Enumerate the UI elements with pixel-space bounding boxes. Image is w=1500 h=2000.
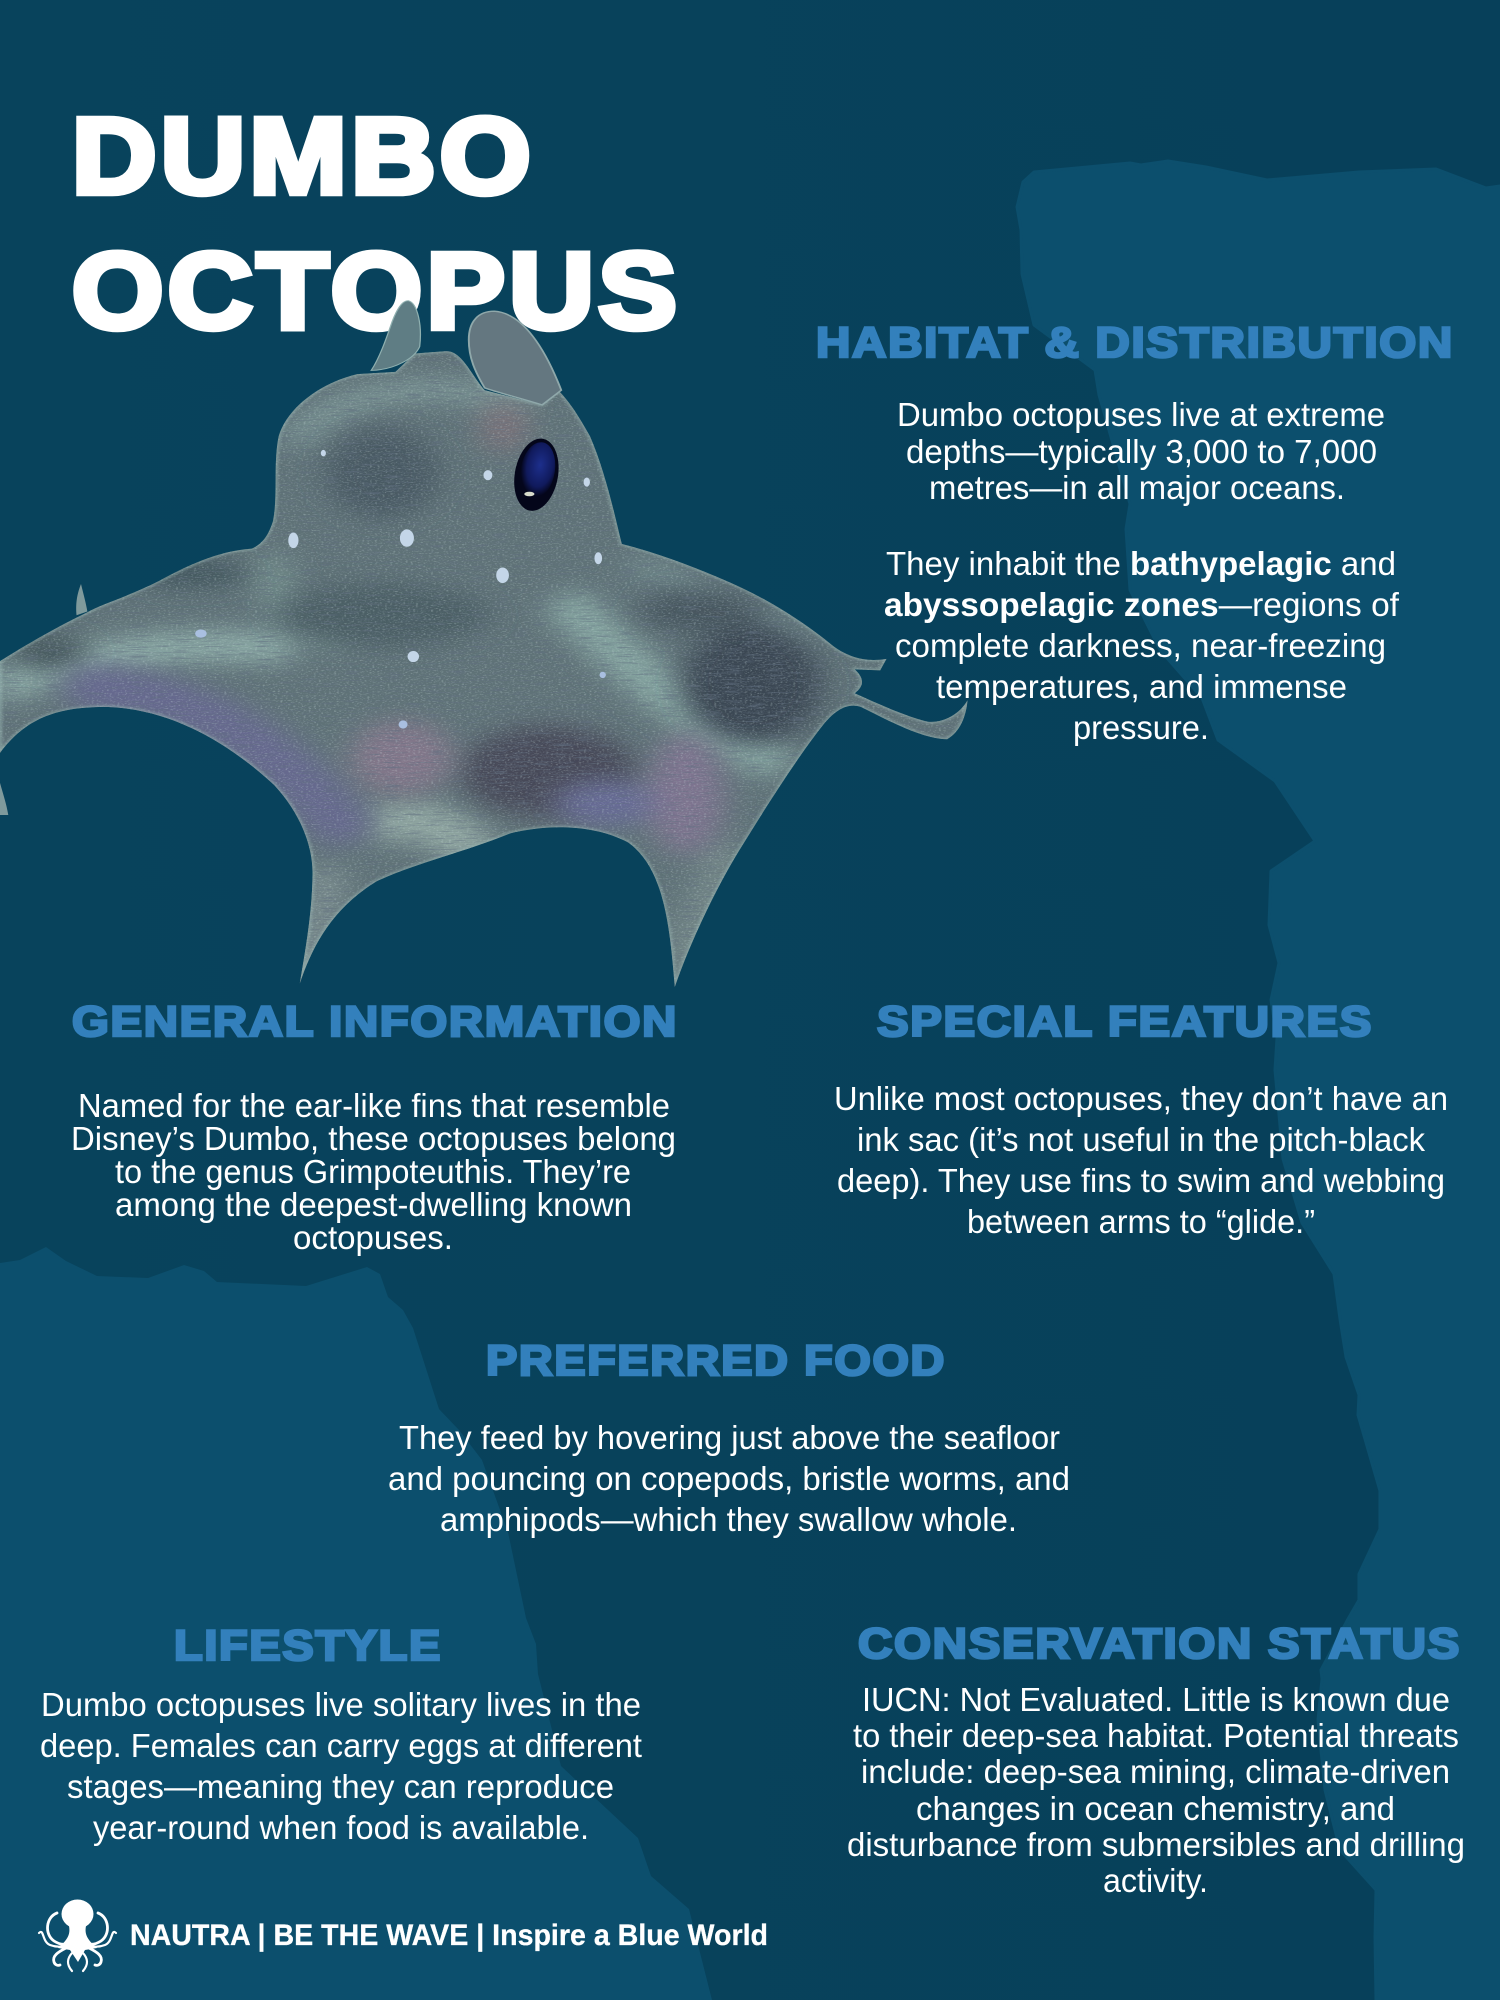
text: habitat body bbox=[884, 396, 1400, 746]
section: habitat and distribution bbox=[816, 319, 1454, 746]
text: conservation status body: to their deep-sea habitat. Potential threats bbox=[853, 1717, 1459, 1754]
arm tip left bbox=[0, 783, 8, 815]
text: preferred food body: amphipods—which they swallow whole. bbox=[440, 1501, 1017, 1538]
text: special features body: deep). They use fins to swim and webbing bbox=[837, 1162, 1445, 1199]
pale rim bbox=[0, 351, 968, 987]
heading: lifestyle: LIFESTYLE bbox=[174, 1622, 442, 1670]
text: habitat body: Dumbo octopuses live at extreme bbox=[897, 396, 1385, 433]
heading: special features: SPECIAL FEATURES bbox=[877, 998, 1373, 1046]
text: general information body: Disney’s Dumbo, these octopuses belong bbox=[71, 1120, 676, 1157]
text: special features body: Unlike most octopuses, they don’t have an bbox=[834, 1080, 1448, 1117]
section: preferred food bbox=[388, 1337, 1070, 1538]
section: lifestyle bbox=[40, 1622, 642, 1846]
text: conservation status body: IUCN: Not Evaluated. Little is known due bbox=[862, 1681, 1450, 1718]
light bands bbox=[13, 390, 804, 978]
text: habitat body: pressure. bbox=[1073, 709, 1209, 746]
text: conservation status body: disturbance from submersibles and drilling bbox=[847, 1826, 1465, 1863]
body bbox=[0, 351, 968, 987]
heading: conservation status: CONSERVATION STATUS bbox=[858, 1620, 1461, 1668]
text: lifestyle body: year-round when food is available. bbox=[93, 1809, 589, 1846]
heading: habitat: HABITAT & DISTRIBUTION bbox=[816, 319, 1454, 367]
text: preferred food body: and pouncing on copepods, bristle worms, and bbox=[388, 1460, 1070, 1497]
title bbox=[72, 95, 681, 351]
background: lighter lower-left rock shape bbox=[0, 1247, 712, 2000]
dark patches bbox=[13, 427, 823, 817]
mauve web patches bbox=[96, 402, 724, 854]
background: lighter right rock shape bbox=[1017, 161, 1500, 2000]
text: conservation status body: include: deep-sea mining, climate-driven bbox=[861, 1753, 1450, 1790]
eye bbox=[510, 437, 563, 512]
text: lifestyle body bbox=[40, 1686, 642, 1846]
text: general information body: among the deepest-dwelling known bbox=[115, 1186, 632, 1223]
text: habitat body: complete darkness, near-freezing bbox=[895, 627, 1386, 664]
text: conservation status body: changes in ocean chemistry, and bbox=[916, 1790, 1395, 1827]
text: lifestyle body: deep. Females can carry eggs at different bbox=[40, 1727, 642, 1764]
left ear fin bbox=[371, 301, 420, 370]
text: lifestyle body: Dumbo octopuses live solitary lives in the bbox=[41, 1686, 641, 1723]
skin spots bbox=[195, 450, 606, 729]
title: DUMBO bbox=[72, 95, 535, 216]
text: preferred food body bbox=[388, 1419, 1070, 1538]
text: special features body: between arms to “glide.” bbox=[967, 1203, 1315, 1240]
text: habitat body: temperatures, and immense bbox=[936, 668, 1347, 705]
text: lifestyle body: stages—meaning they can reproduce bbox=[67, 1768, 614, 1805]
icon: octopus logo bbox=[39, 1900, 116, 1971]
title: OCTOPUS bbox=[72, 230, 681, 351]
right ear fin bbox=[469, 311, 561, 405]
text: special features body: ink sac (it’s not useful in the pitch-black bbox=[857, 1121, 1425, 1158]
text: conservation status body bbox=[847, 1681, 1465, 1899]
text: general information body: Named for the ear-like fins that resemble bbox=[78, 1087, 670, 1124]
text: habitat body: depths—typically 3,000 to 7,000 bbox=[906, 433, 1377, 470]
heading: preferred food: PREFERRED FOOD bbox=[486, 1337, 946, 1385]
text: general information body: to the genus Grimpoteuthis. They’re bbox=[115, 1153, 631, 1190]
skin texture bbox=[0, 351, 965, 986]
heading: general information: GENERAL INFORMATION bbox=[72, 998, 678, 1046]
section: conservation status bbox=[847, 1620, 1465, 1899]
text: conservation status body: activity. bbox=[1103, 1862, 1208, 1899]
arm spike left bbox=[76, 584, 87, 615]
footer bbox=[39, 1900, 768, 1971]
text: habitat body: metres—in all major oceans. bbox=[929, 469, 1345, 506]
text: general information body: octopuses. bbox=[293, 1219, 453, 1256]
octopus illustration bbox=[0, 280, 976, 996]
section: special features bbox=[834, 998, 1448, 1240]
text: preferred food body: They feed by hovering just above the seafloor bbox=[399, 1419, 1060, 1456]
text: general information body bbox=[71, 1087, 676, 1256]
text: habitat body: They inhabit the bathypelagic and bbox=[886, 545, 1396, 582]
section: general information bbox=[71, 998, 678, 1256]
text: habitat body: abyssopelagic zones—regions of bbox=[884, 586, 1400, 623]
text: footer tagline: NAUTRA | BE THE WAVE | Inspire a Blue World bbox=[130, 1919, 768, 1952]
text: special features body bbox=[834, 1080, 1448, 1240]
